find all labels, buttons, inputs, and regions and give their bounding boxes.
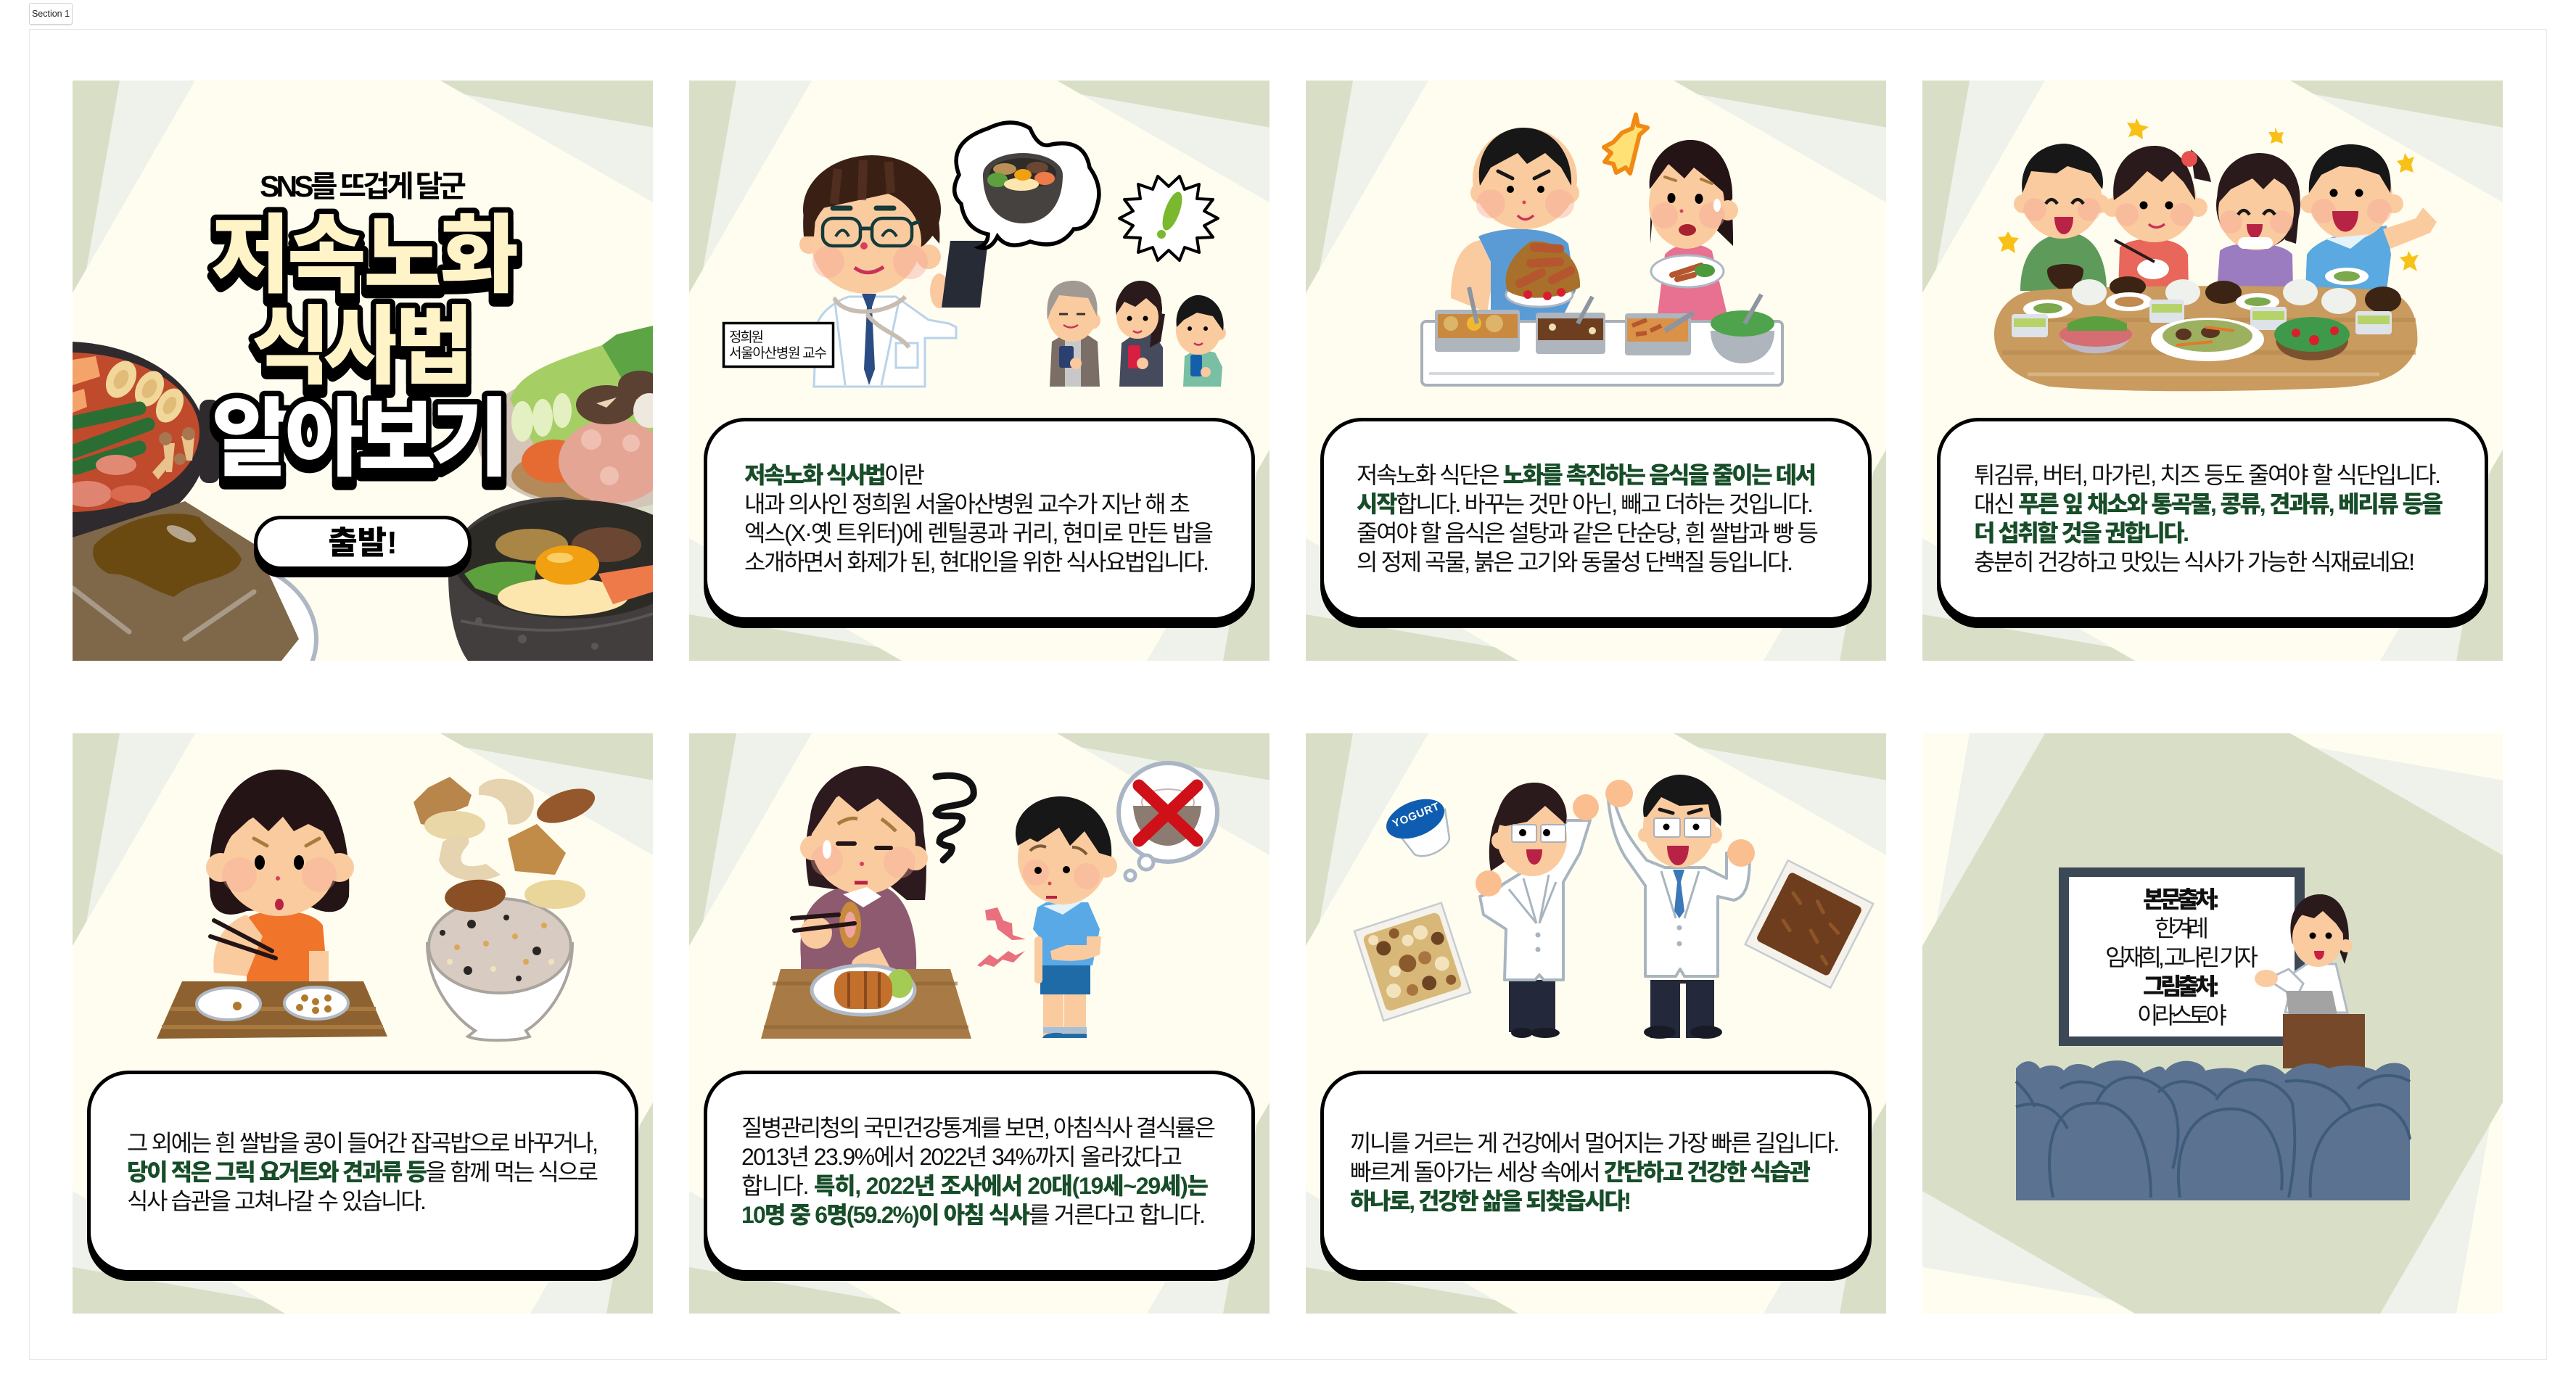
icon: thought bubble no rice xyxy=(1119,763,1217,881)
illustration: man piling food xyxy=(1451,128,1580,320)
text box: 대신 푸른 잎 채소와 통곡물, 콩류, 견과류, 베리류 등을 xyxy=(1974,491,2443,517)
panel 8: sources xyxy=(1922,733,2503,1314)
illustration: three people with phones xyxy=(1047,281,1226,387)
illustration: boy holding stomach xyxy=(1016,796,1117,1038)
presentation screen with credits: 한겨레 xyxy=(2155,915,2209,941)
text box: 10명 중 6명(59.2%)이 아침 식사를 거른다고 합니다. xyxy=(741,1202,1206,1228)
name label: 정희원 xyxy=(729,329,764,345)
text box: 하나로, 건강한 삶을 되찾읍시다! xyxy=(1350,1188,1631,1214)
illustration: doctor with phone xyxy=(799,155,988,387)
presentation screen with credits xyxy=(2059,867,2305,1046)
illustration: family characters xyxy=(2014,144,2437,291)
text box xyxy=(87,1072,638,1281)
panel 4: what to eat more xyxy=(1922,81,2503,661)
name label: 서울아산병원 교수 xyxy=(729,345,827,361)
text box: 저속노화 식단은 노화를 촉진하는 음식을 줄이는 데서 xyxy=(1357,462,1816,488)
icon: yogurt cup: YOGURT xyxy=(1391,800,1441,830)
illustration: female doctor cheering xyxy=(1476,783,1599,1038)
illustration: tired woman eating cutlet xyxy=(792,766,928,969)
illustration: worried woman with plate xyxy=(1649,140,1738,327)
text box: 더 섭취할 것을 권합니다. xyxy=(1974,520,2189,546)
panel 6: skipping breakfast statistics xyxy=(689,733,1270,1314)
text box xyxy=(704,419,1255,628)
panel 2: definition xyxy=(689,81,1270,661)
illustration: kimchi stew pot xyxy=(0,342,220,545)
icon: bag of raisins xyxy=(1745,860,1873,988)
text box: 빠르게 돌아가는 세상 속에서 간단하고 건강한 식습관 xyxy=(1350,1159,1811,1185)
text box xyxy=(704,1072,1255,1281)
presentation screen with credits: 이라스토야 xyxy=(2137,1002,2227,1029)
icon: exclamation burst xyxy=(1119,176,1218,260)
illustration: multigrain rice bowl xyxy=(427,899,572,1040)
text box: 당이 적은 그릭 요거트와 견과류 등을 함께 먹는 식으로 xyxy=(127,1159,598,1185)
presentation screen with credits: 그림출처: xyxy=(2143,973,2220,999)
text box: 의 정제 곡물, 붉은 고기와 동물성 단백질 등입니다. xyxy=(1357,549,1793,575)
text box: 내과 의사인 정희원 서울아산병원 교수가 지난 해 초 xyxy=(744,491,1190,517)
title heading: 식사법 xyxy=(252,300,474,395)
name label xyxy=(724,323,833,367)
text box: 시작합니다. 바꾸는 것만 아닌, 빼고 더하는 것입니다. xyxy=(1357,491,1814,517)
text box: 끼니를 거르는 게 건강에서 멀어지는 가장 빠른 길입니다. xyxy=(1350,1130,1840,1156)
panel 1: title cover xyxy=(73,81,653,661)
title kicker: SNS를 뜨겁게 달군 xyxy=(260,170,466,203)
illustration: audience heads xyxy=(2016,1060,2410,1200)
panel 5: multigrain and yogurt xyxy=(73,733,653,1314)
illustration: braised tofu block xyxy=(73,501,299,661)
title heading: 저속노화 xyxy=(211,208,519,304)
illustration: presenter at podium xyxy=(2255,894,2365,1068)
illustration: buffet table xyxy=(1422,287,1782,385)
presentation screen with credits: 본문출처: xyxy=(2143,886,2220,912)
speech bubble with bibimbap xyxy=(955,123,1099,248)
title heading: 알아보기 xyxy=(212,400,509,495)
text box: 식사 습관을 고쳐나갈 수 있습니다. xyxy=(127,1188,427,1214)
illustration: table with cutlet xyxy=(761,965,971,1039)
text box: 줄여야 할 음식은 설탕과 같은 단순당, 흰 쌀밥과 빵 등 xyxy=(1357,520,1819,546)
title heading: 저속노화 xyxy=(211,216,519,312)
title heading: 알아보기 xyxy=(212,392,509,487)
panel 3: what to reduce xyxy=(1306,81,1886,661)
icon: scribble of worry xyxy=(936,775,974,860)
text box: 질병관리청의 국민건강통계를 보면, 아침식사 결식률은 xyxy=(741,1115,1216,1141)
text box xyxy=(1320,419,1872,628)
icon: yellow stars xyxy=(1998,118,2419,271)
start button xyxy=(254,518,472,577)
section tab xyxy=(29,3,73,25)
title heading: 식사법 xyxy=(252,308,474,403)
text box: 그 외에는 흰 쌀밥을 콩이 들어간 잡곡밥으로 바꾸거나, xyxy=(127,1130,598,1156)
text box: 충분히 건강하고 맛있는 식사가 가능한 식재료네요! xyxy=(1974,549,2415,575)
illustration: mixed nuts xyxy=(413,777,599,915)
text box: 소개하면서 화제가 된, 현대인을 위한 식사요법입니다. xyxy=(744,549,1209,575)
illustration: wooden tray with plates xyxy=(157,981,387,1039)
illustration: dining table with dishes xyxy=(1994,268,2417,391)
text box: 2013년 23.9%에서 2022년 34%까지 올라갔다고 xyxy=(741,1144,1182,1170)
text box xyxy=(1320,1072,1872,1281)
start button: 출발! xyxy=(328,525,398,561)
icon: yogurt cup xyxy=(1380,791,1450,856)
illustration: male doctor cheering xyxy=(1605,775,1755,1039)
text box: 엑스(X·옛 트위터)에 렌틸콩과 귀리, 현미로 만든 밥을 xyxy=(744,520,1214,546)
text box: 튀김류, 버터, 마가린, 치즈 등도 줄여야 할 식단입니다. xyxy=(1974,462,2441,488)
illustration: girl eating with chopsticks xyxy=(206,770,354,984)
illustration: stone bowl bibimbap xyxy=(448,497,693,661)
section tab: Section 1 xyxy=(32,9,70,19)
text box: 합니다. 특히, 2022년 조사에서 20대(19세~29세)는 xyxy=(741,1173,1209,1199)
text box xyxy=(1937,419,2488,628)
text box: 저속노화 식사법이란 xyxy=(744,462,925,488)
icon: surprise burst xyxy=(1604,115,1647,173)
illustration: vegetable and meat bowl xyxy=(477,326,727,511)
icon: pain zigzags xyxy=(977,907,1026,967)
illustration: plate under tofu xyxy=(119,559,316,719)
panel 7: conclusion xyxy=(1306,733,1886,1314)
presentation screen with credits: 임재희, 고나린 기자 xyxy=(2105,944,2258,970)
title heading xyxy=(211,208,519,495)
icon: bag of mixed nuts xyxy=(1354,903,1470,1021)
